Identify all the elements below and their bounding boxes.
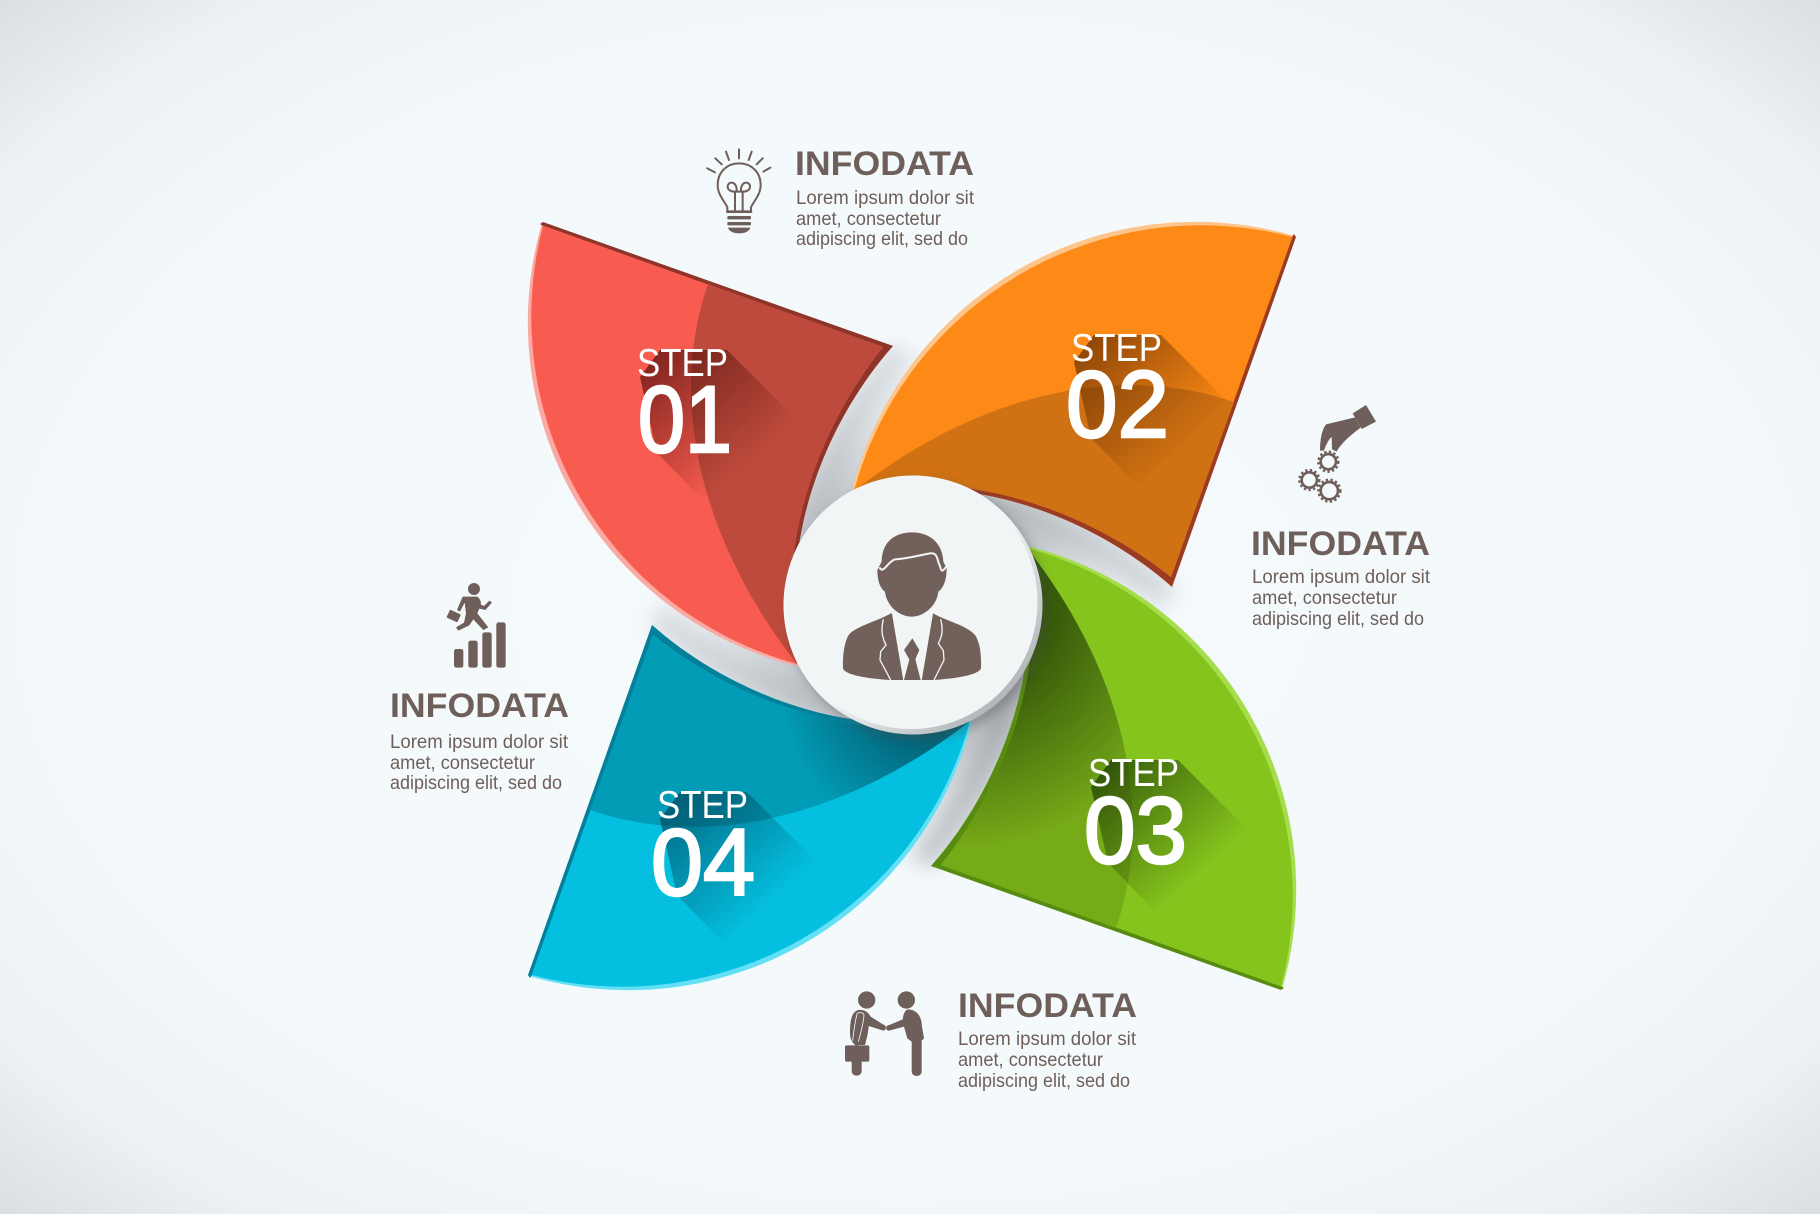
gap shadows behind petals [606,300,1218,912]
info block: bottom: Lorem ipsum dolor sit [958,1028,1137,1050]
info block: top [707,145,975,250]
icon: light bulb [707,149,770,233]
step 03 label [1084,752,1251,910]
petal: step 04 blue [528,625,972,990]
step 03 label: 03 [1084,778,1187,884]
info block: top: adipiscing elit, sed do [796,228,968,250]
info block: right: amet, consectetur [1252,587,1397,609]
info block: left: INFODATA [390,687,569,725]
icon: runner on bar chart [446,583,506,668]
step 02 label: STEP [1071,327,1162,370]
step 04 label: 04 [651,810,755,916]
info block: bottom: amet, consectetur [958,1049,1103,1071]
info block: right [1251,405,1431,630]
petal: step 03 green [931,546,1296,990]
info block: bottom: adipiscing elit, sed do [958,1070,1130,1092]
step 01 label: STEP [637,342,728,385]
info block: right: adipiscing elit, sed do [1252,608,1424,630]
info block: bottom: INFODATA [958,987,1137,1025]
step 01 label [637,342,800,500]
petal: step 02 orange [852,222,1296,587]
info block: left [390,583,569,794]
icon: handshake [845,991,924,1076]
icon: hand with gears [1299,405,1376,502]
step 04 label [651,784,820,942]
step 02 label [1066,327,1234,485]
info block: right: INFODATA [1251,525,1430,563]
info block: right: Lorem ipsum dolor sit [1252,566,1431,588]
step 01 label: 01 [638,367,732,473]
icon: businessman [843,532,981,681]
step 03 label: STEP [1088,752,1179,795]
step 02 label: 02 [1066,352,1169,458]
info block: left: adipiscing elit, sed do [390,772,562,794]
info block: top: amet, consectetur [796,208,941,230]
info block: top: INFODATA [795,145,974,183]
petal: step 01 red [528,222,893,666]
info block: left: amet, consectetur [390,752,535,774]
info block: left: Lorem ipsum dolor sit [390,731,569,753]
center circle with person icon [784,476,1047,740]
info block: top: Lorem ipsum dolor sit [796,187,975,209]
step 04 label: STEP [657,784,748,827]
info block: bottom [845,987,1137,1092]
